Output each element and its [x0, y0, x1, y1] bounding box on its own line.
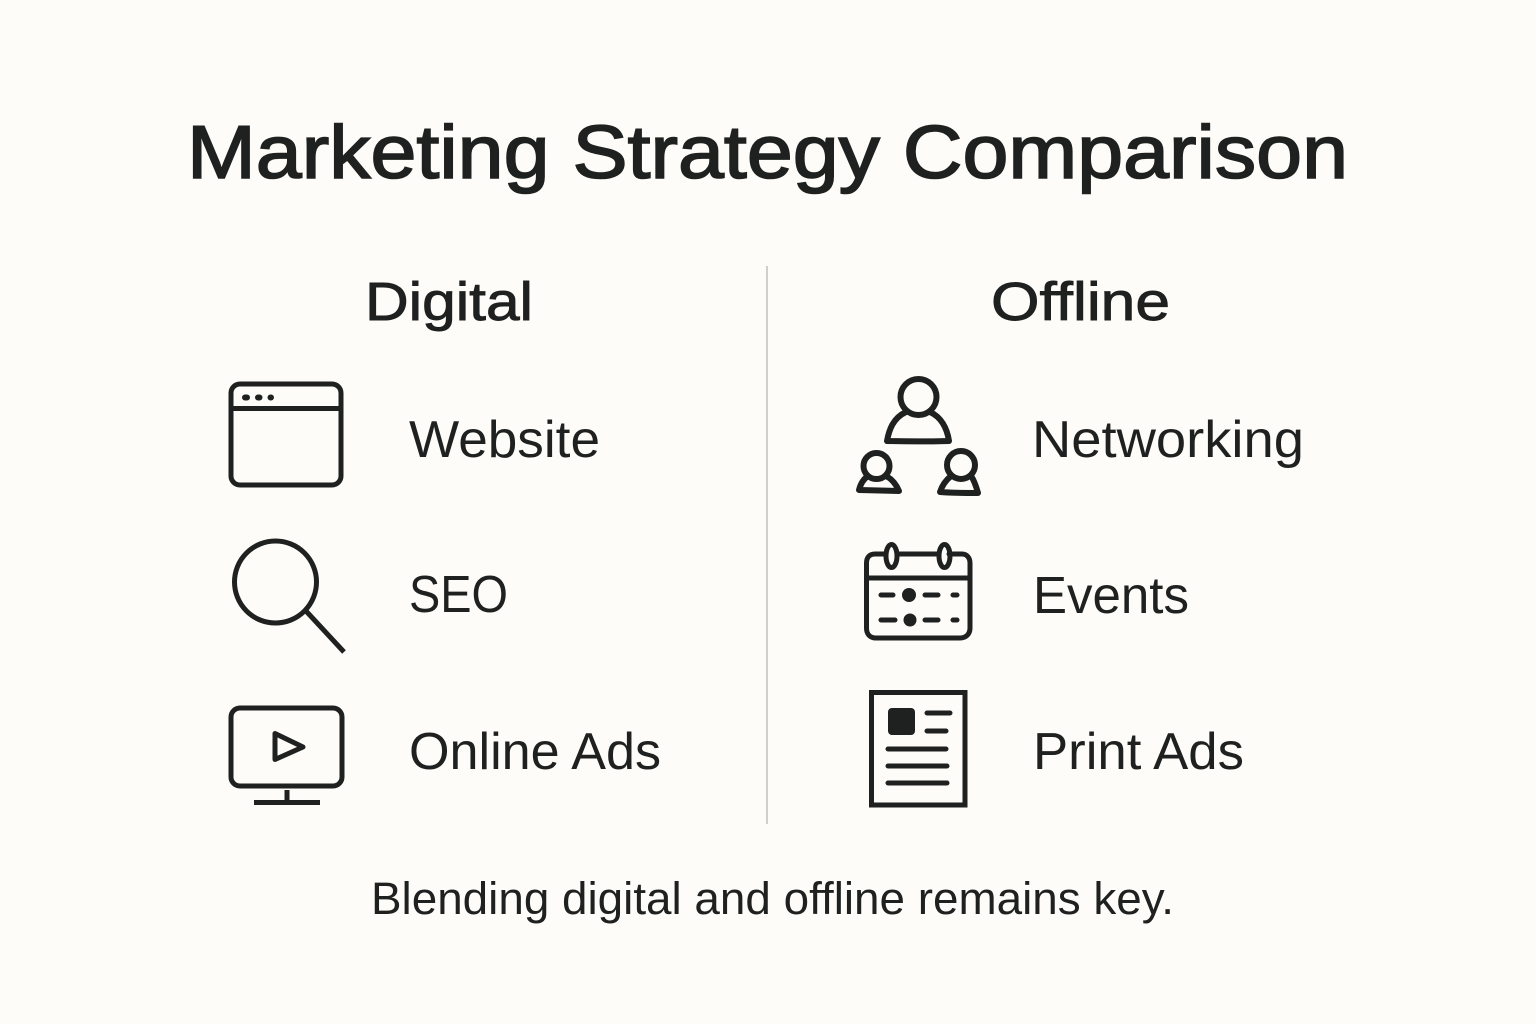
label: events: Events — [1033, 567, 1189, 625]
icon: browser window — [231, 384, 341, 485]
panel: digital — [231, 272, 661, 802]
label: online ads: Online Ads — [409, 723, 661, 781]
label: website: Website — [409, 411, 600, 469]
label: networking: Networking — [1032, 411, 1304, 469]
heading: offline: Offline — [991, 272, 1170, 332]
icon: calendar — [866, 544, 970, 638]
title: Marketing Strategy Comparison — [187, 110, 1348, 194]
footer note: Blending digital and offline remains key. — [371, 873, 1174, 924]
center divider — [766, 266, 768, 824]
icon: magnifying glass — [234, 541, 344, 652]
icon: video monitor — [231, 708, 342, 802]
label: seo: SEO — [409, 566, 508, 624]
label: print ads: Print Ads — [1033, 723, 1244, 781]
icon: print document — [872, 692, 965, 805]
panel: offline — [859, 272, 1304, 805]
heading: digital: Digital — [365, 272, 533, 332]
icon: networking people — [859, 379, 978, 493]
